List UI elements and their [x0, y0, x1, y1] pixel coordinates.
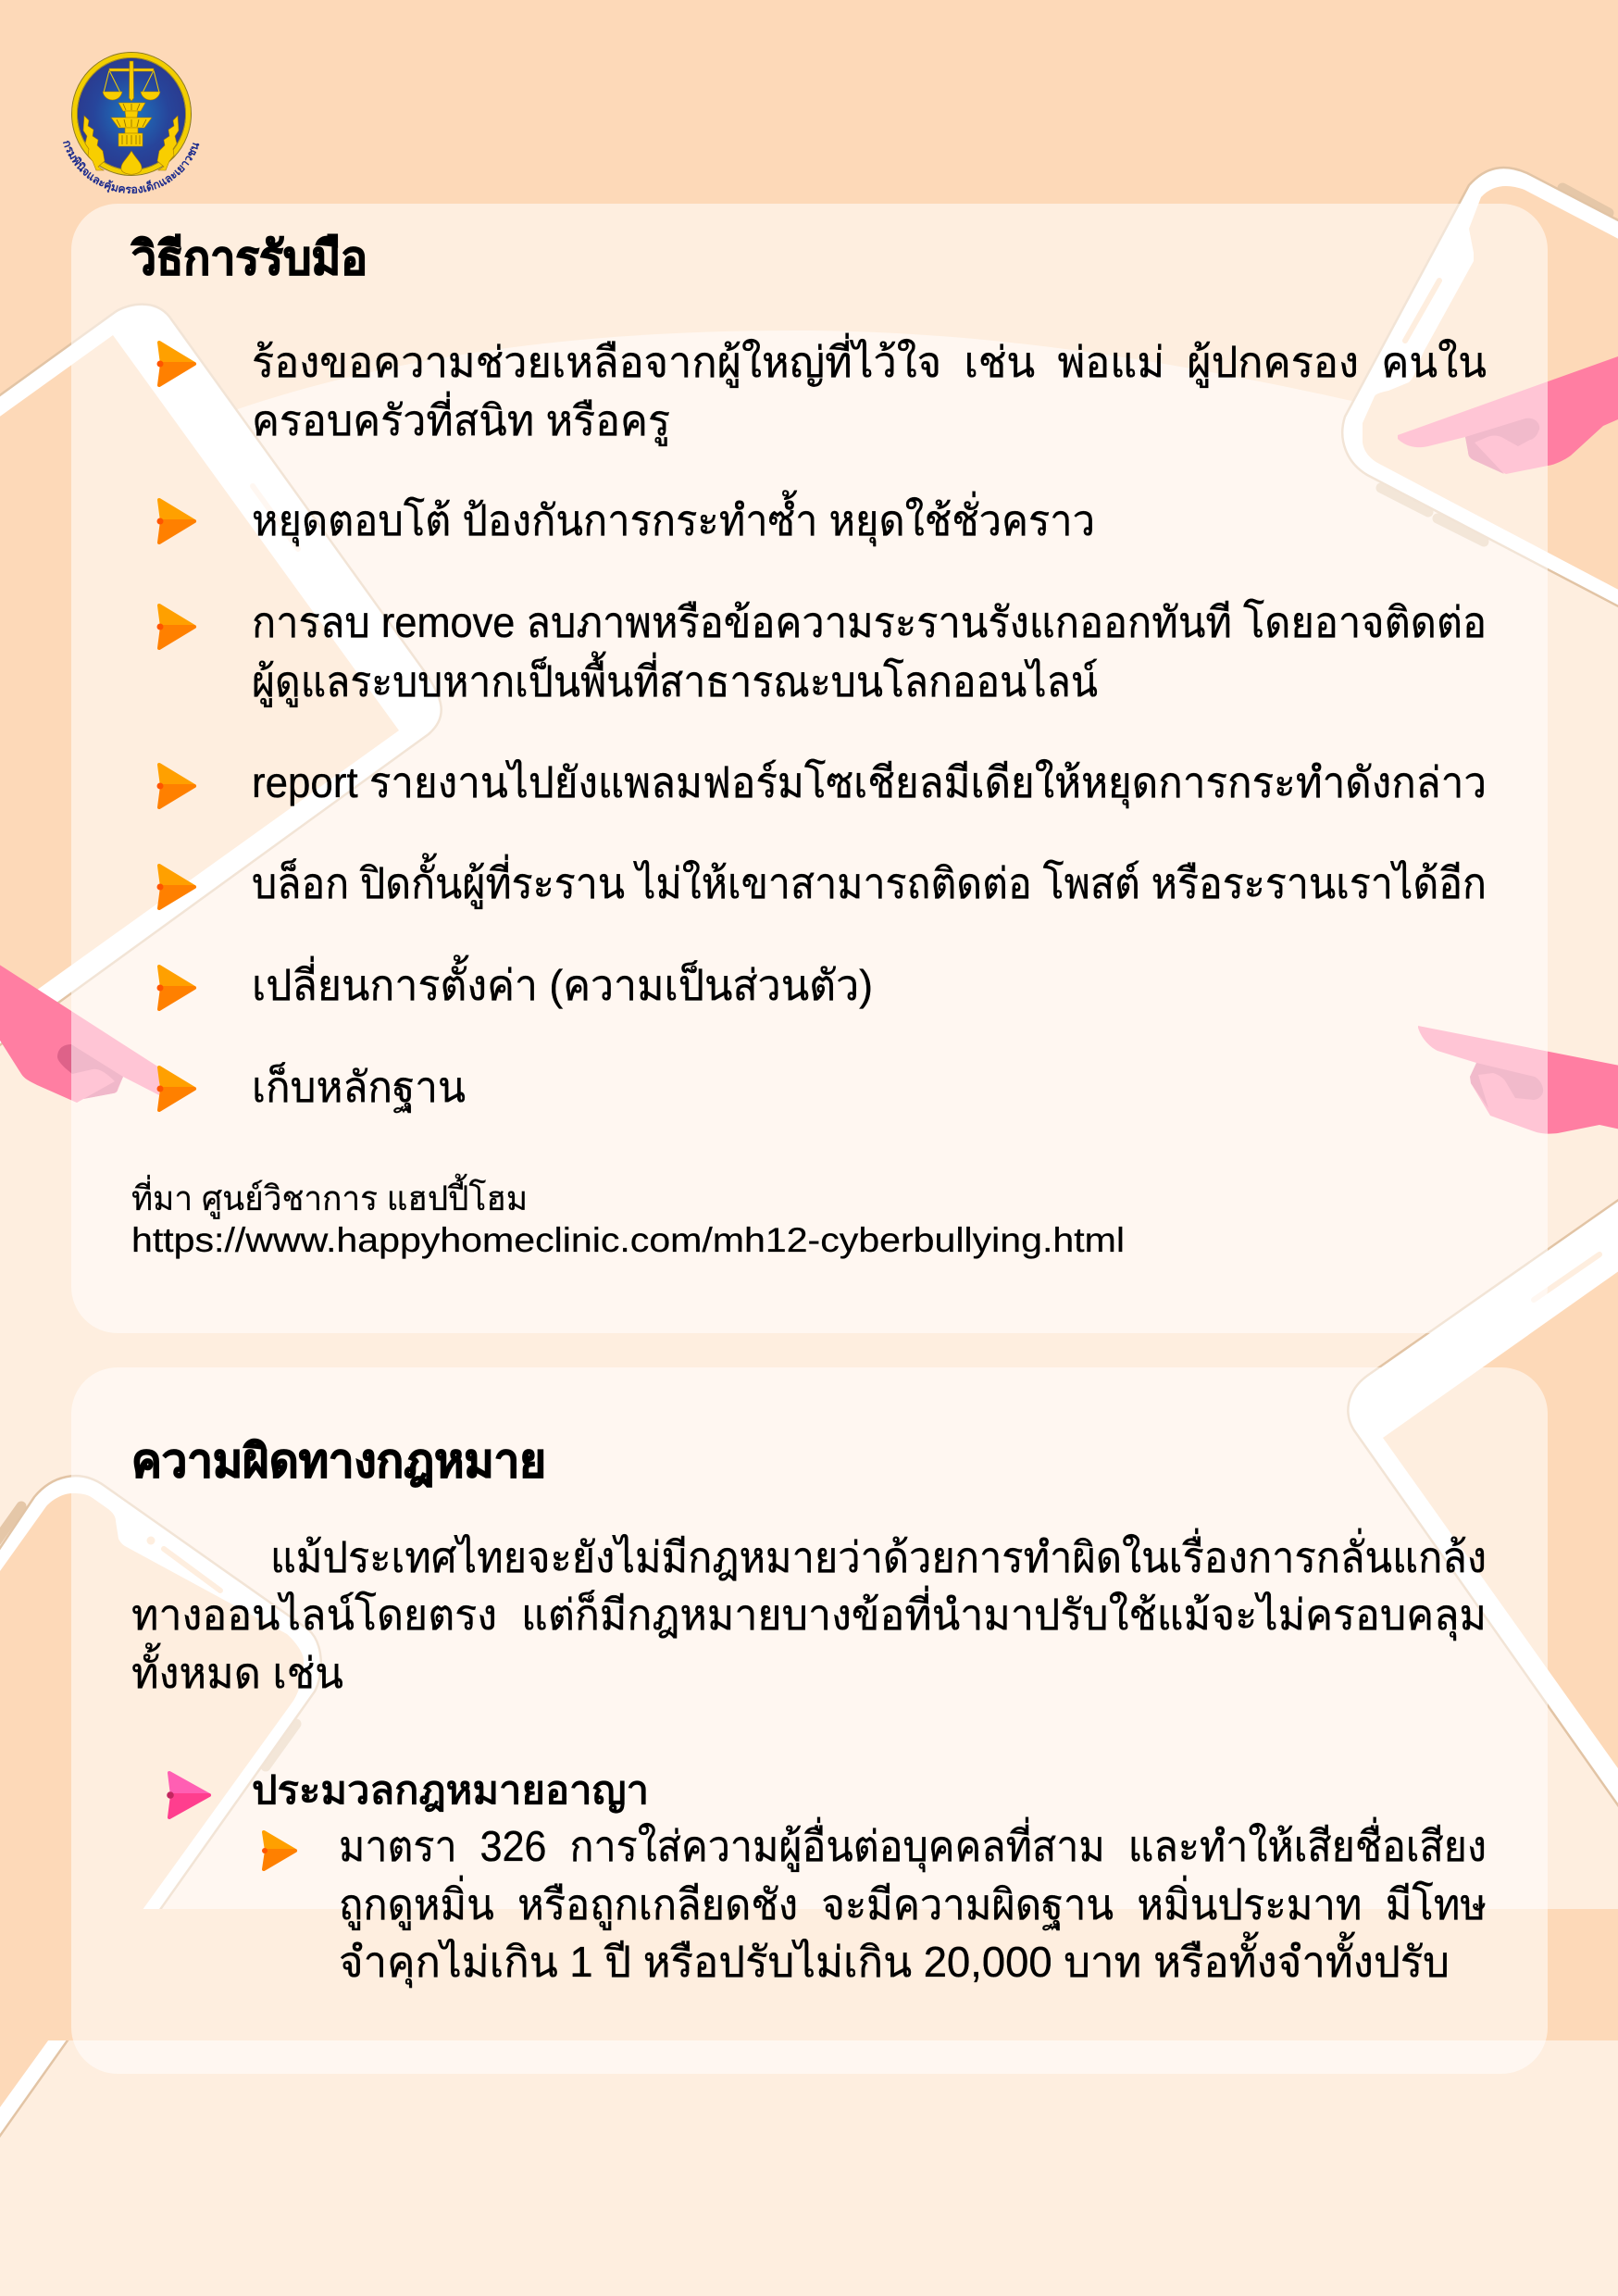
- item 2 text: หยุดตอบโต้ ป้องกันการกระทำซ้ำ หยุดใช้ชั่วคราว: [252, 490, 1095, 547]
- source credit: ที่มา ศูนย์วิชาการ แฮปปี้โฮม: [131, 1173, 528, 1219]
- panel: legal liability: [71, 1367, 1548, 2074]
- item 1 text: ร้องขอความช่วยเหลือจากผู้ใหญ่ที่ไว้ใจ เช่น พ่อแม่ ผู้ปกครอง คนใน: [252, 332, 1487, 388]
- phone: left lower: [0, 1476, 321, 2149]
- pointing hand: top right: [1398, 356, 1618, 474]
- item 1 text: ครอบครัวที่สนิท หรือครู: [252, 391, 670, 446]
- arrow bullet 4: [157, 765, 194, 807]
- peach band: [0, 1909, 1618, 2040]
- section 326 text: ถูกดูหมิ่น หรือถูกเกลียดชัง จะมีความผิดฐาน หมิ่นประมาท มีโทษ: [339, 1875, 1487, 1930]
- source credit: https://www.happyhomeclinic.com/mh12-cyberbullying.html: [131, 1221, 1125, 1259]
- panel: coping methods: [71, 204, 1548, 1333]
- arrow bullet: section 326: [262, 1832, 295, 1869]
- item 3 text: การลบ remove ลบภาพหรือข้อความระรานรังแกออกทันที โดยอาจติดต่อ: [252, 598, 1487, 646]
- item 5 text: บล็อก ปิดกั้นผู้ที่ระราน ไม่ให้เขาสามารถติดต่อ โพสต์ หรือระรานเราได้อีก: [252, 853, 1487, 909]
- arrow bullet 7: [157, 1067, 194, 1110]
- item 1 text: [252, 332, 1487, 446]
- intro paragraph: ทั้งหมด เช่น: [131, 1642, 343, 1697]
- phone: top right: [1342, 168, 1618, 612]
- subheading: criminal code: ประมวลกฎหมายอาญา: [252, 1768, 649, 1814]
- phone: right lower: [1348, 1192, 1618, 1944]
- arrow bullet: pink: [167, 1773, 209, 1817]
- phone: left middle: [0, 305, 442, 1052]
- intro paragraph: แม้ประเทศไทยจะยังไม่มีกฎหมายว่าด้วยการทำผิดในเรื่องการกลั่นแกล้ง: [270, 1528, 1487, 1581]
- arrow bullet 2: [157, 500, 194, 543]
- logo: department emblem: [63, 52, 200, 193]
- item 7 text: เก็บหลักฐาน: [252, 1062, 466, 1113]
- source credit: [131, 1173, 1125, 1259]
- section 326 text: [339, 1816, 1487, 1989]
- item 3 text: [252, 598, 1487, 707]
- pointing hand: right: [1418, 1026, 1618, 1134]
- section 326 text: จำคุกไม่เกิน 1 ปี หรือปรับไม่เกิน 20,000 บาท หรือทั้งจำทั้งปรับ: [339, 1931, 1450, 1989]
- heading: coping methods: วิธีการรับมือ: [131, 232, 367, 284]
- arrow bullet 3: [157, 605, 194, 648]
- arrow bullet 6: [157, 967, 194, 1009]
- logo: department emblem: กรมพินิจและคุ้มครองเด็กและเยาวชน: [63, 141, 200, 193]
- section 326 text: มาตรา 326 การใส่ความผู้อื่นต่อบุคคลที่สาม และทำให้เสียชื่อเสียง: [339, 1816, 1487, 1873]
- item 4 text: report รายงานไปยังแพลมฟอร์มโซเชียลมีเดียให้หยุดการกระทำดังกล่าว: [252, 758, 1487, 809]
- arrow bullet 1: [157, 343, 194, 385]
- pointing hand: left: [0, 959, 159, 1103]
- intro paragraph: [131, 1528, 1487, 1697]
- intro paragraph: ทางออนไลน์โดยตรง แต่ก็มีกฎหมายบางข้อที่นำมาปรับใช้แม้จะไม่ครอบคลุม: [131, 1585, 1487, 1641]
- item 3 text: ผู้ดูแลระบบหากเป็นพื้นที่สาธารณะบนโลกออนไลน์: [252, 651, 1098, 707]
- item 6 text: เปลี่ยนการตั้งค่า (ความเป็นส่วนตัว): [252, 955, 873, 1009]
- heading: legal liability: ความผิดทางกฎหมาย: [131, 1435, 546, 1487]
- arrow bullet 5: [157, 866, 194, 908]
